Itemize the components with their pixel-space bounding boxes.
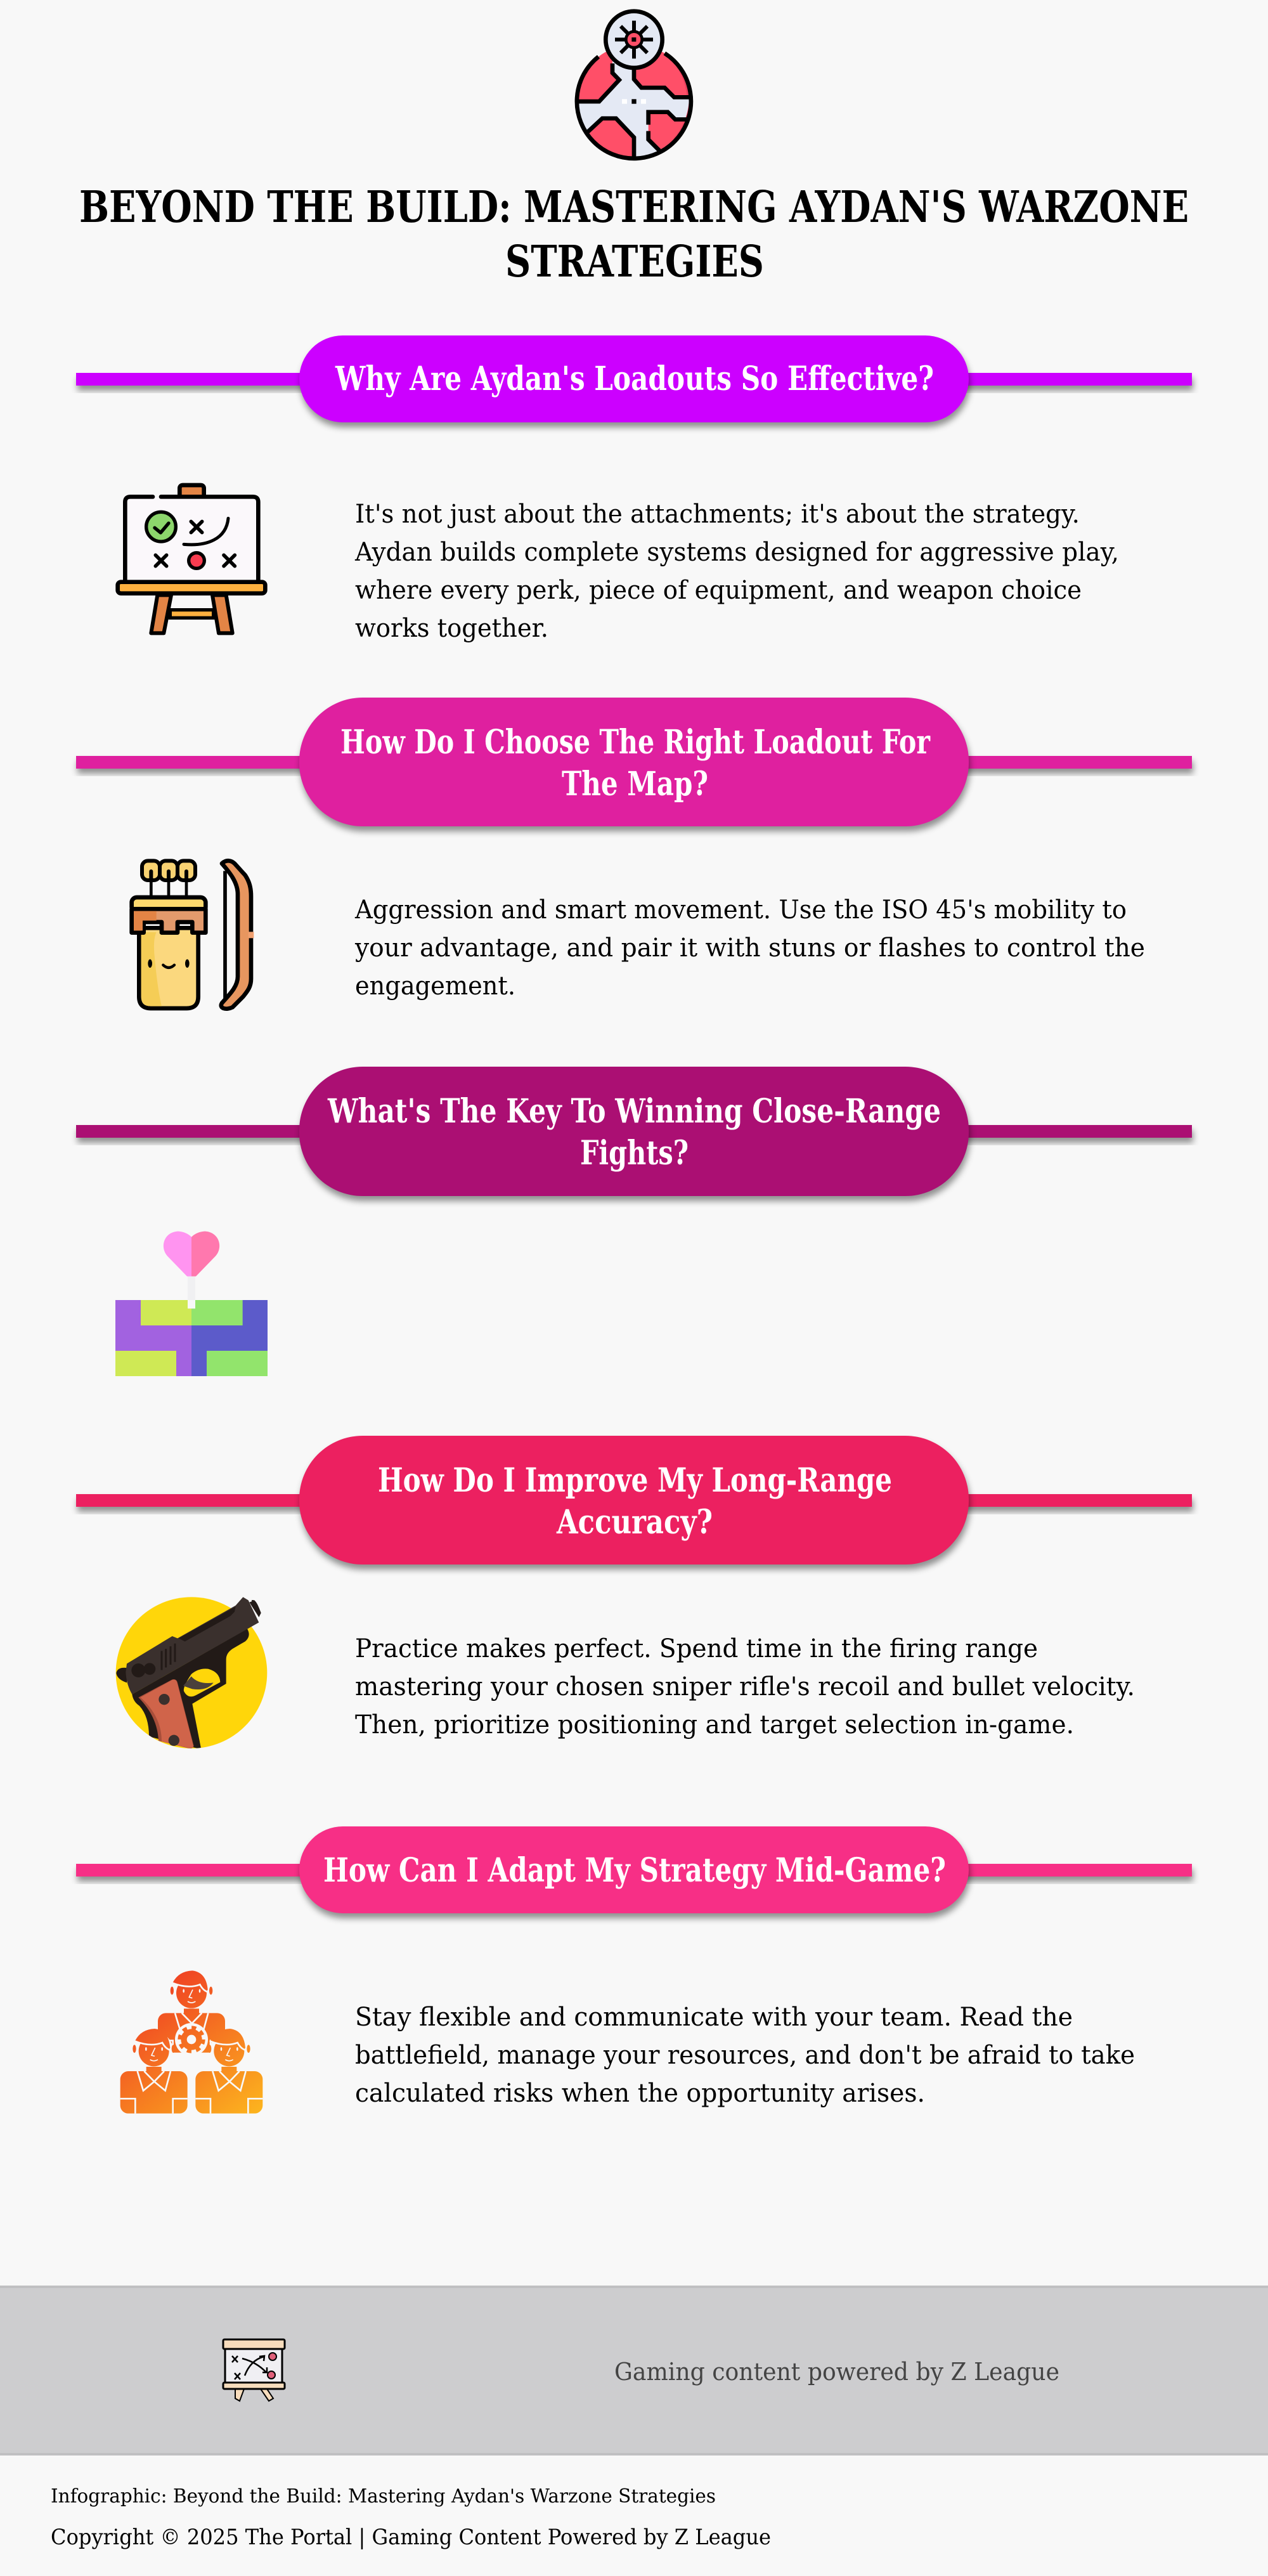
heading banner: close-range fights: What's The Key To Winning Close-Range: [327, 1092, 941, 1131]
text block: choose right loadout: [354, 895, 1145, 1001]
heading banner: close-range fights: Fights?: [580, 1134, 689, 1173]
heading banner: long-range accuracy: Accuracy?: [556, 1503, 713, 1542]
icon: tactics easel: [118, 485, 265, 633]
footer caption: infographic title: Infographic: Beyond the Build: Mastering Aydan's Warzone Strategies: [51, 2485, 716, 2508]
heading banner: choose right loadout: How Do I Choose The Right Loadout For: [340, 723, 930, 762]
icon: pistol on yellow circle: [116, 1597, 267, 1749]
icon: heart on colour blocks: [115, 1232, 268, 1376]
heading banner: adapt mid-game: [76, 1826, 1192, 1913]
footer tagline: Gaming content powered by Z League: [614, 2358, 1059, 2386]
title: [79, 182, 1189, 287]
text block: why loadouts effective: Aydan builds complete systems designed for aggressive play,: [354, 538, 1119, 567]
text block: long-range accuracy: Then, prioritize positioning and target selection in-game.: [355, 1710, 1074, 1740]
text block: adapt mid-game: [355, 2003, 1135, 2108]
text block: adapt mid-game: calculated risks when the opportunity arises.: [355, 2079, 925, 2108]
icon: quiver and bow: [132, 861, 254, 1009]
title: STRATEGIES: [505, 237, 764, 287]
heading banner: long-range accuracy: How Do I Improve My Long-Range: [378, 1461, 892, 1500]
heading banner: adapt mid-game: How Can I Adapt My Strategy Mid-Game?: [323, 1851, 946, 1890]
icon: small tactics board: [223, 2339, 285, 2401]
heading banner: why loadouts effective: Why Are Aydan's Loadouts So Effective?: [335, 360, 934, 398]
text block: long-range accuracy: mastering your chosen sniper rifle's recoil and bullet velocity.: [355, 1672, 1135, 1701]
heading banner: long-range accuracy: [76, 1436, 1192, 1564]
heading banner: close-range fights: [76, 1067, 1192, 1196]
text block: choose right loadout: Aggression and smart movement. Use the ISO 45's mobility to: [354, 895, 1127, 925]
text block: choose right loadout: engagement.: [355, 972, 515, 1001]
text block: why loadouts effective: works together.: [355, 614, 548, 643]
heading banner: choose right loadout: [76, 698, 1192, 826]
footer caption: copyright: Copyright © 2025 The Portal | Gaming Content Powered by Z League: [51, 2525, 771, 2550]
footer band: [0, 2286, 1268, 2456]
text block: long-range accuracy: [355, 1634, 1135, 1740]
text block: adapt mid-game: Stay flexible and communicate with your team. Read the: [355, 2003, 1073, 2032]
heading banner: why loadouts effective: [76, 335, 1192, 422]
text block: why loadouts effective: where every perk, piece of equipment, and weapon choice: [355, 576, 1082, 605]
text block: why loadouts effective: [354, 500, 1119, 643]
text block: long-range accuracy: Practice makes perfect. Spend time in the firing range: [355, 1634, 1038, 1663]
text block: why loadouts effective: It's not just about the attachments; it's about the strategy.: [355, 500, 1080, 529]
icon: team with gear: [120, 1970, 262, 2114]
icon: globe with virus badge: [574, 9, 694, 161]
heading banner: choose right loadout: The Map?: [562, 765, 708, 803]
text block: choose right loadout: your advantage, and pair it with stuns or flashes to control the: [354, 933, 1145, 963]
text block: adapt mid-game: battlefield, manage your resources, and don't be afraid to take: [355, 2041, 1135, 2070]
